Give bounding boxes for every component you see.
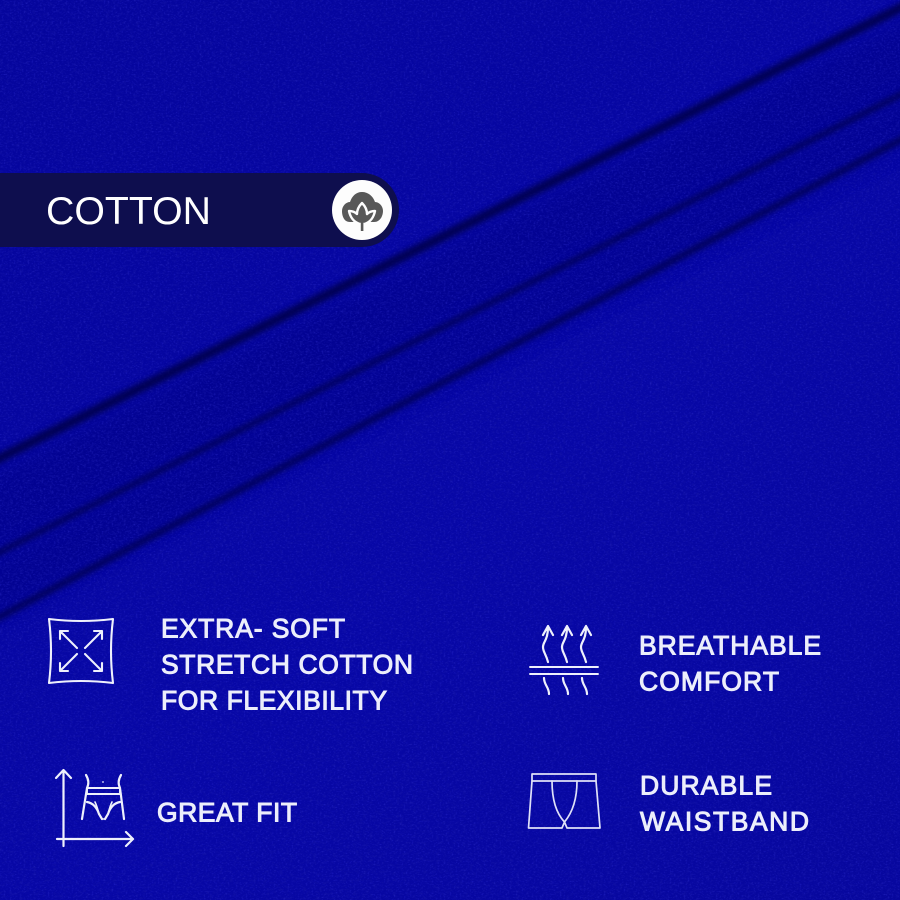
banner: cotton (0, 173, 399, 247)
icon: fit chart with briefs (56, 770, 133, 846)
heading: cotton: COTTON (46, 190, 211, 233)
text: breathable comfort (639, 630, 821, 696)
text: extra-soft stretch cotton for flexibility: STRETCH COTTON (161, 650, 413, 680)
icon: boxer briefs (528, 774, 600, 828)
feature: great fit (56, 770, 297, 846)
text: durable waistband: DURABLE (640, 770, 772, 800)
text: great fit: GREAT FIT (157, 798, 297, 828)
feature: breathable comfort (530, 626, 821, 696)
text: durable waistband (640, 770, 809, 836)
text: extra-soft stretch cotton for flexibility (161, 614, 413, 716)
feature: extra-soft stretch cotton (49, 614, 413, 716)
feature: durable waistband (528, 770, 809, 836)
text: durable waistband: WAISTBAND (640, 806, 809, 836)
text: extra-soft stretch cotton for flexibility: FOR FLEXIBILITY (161, 686, 387, 716)
icon: cotton boll (332, 180, 392, 240)
text: extra-soft stretch cotton for flexibility: EXTRA- SOFT (161, 614, 345, 644)
text: breathable comfort: COMFORT (639, 666, 779, 696)
icon: breathable layers (530, 626, 598, 694)
text: breathable comfort: BREATHABLE (639, 630, 821, 660)
icon: stretch square (49, 619, 113, 683)
